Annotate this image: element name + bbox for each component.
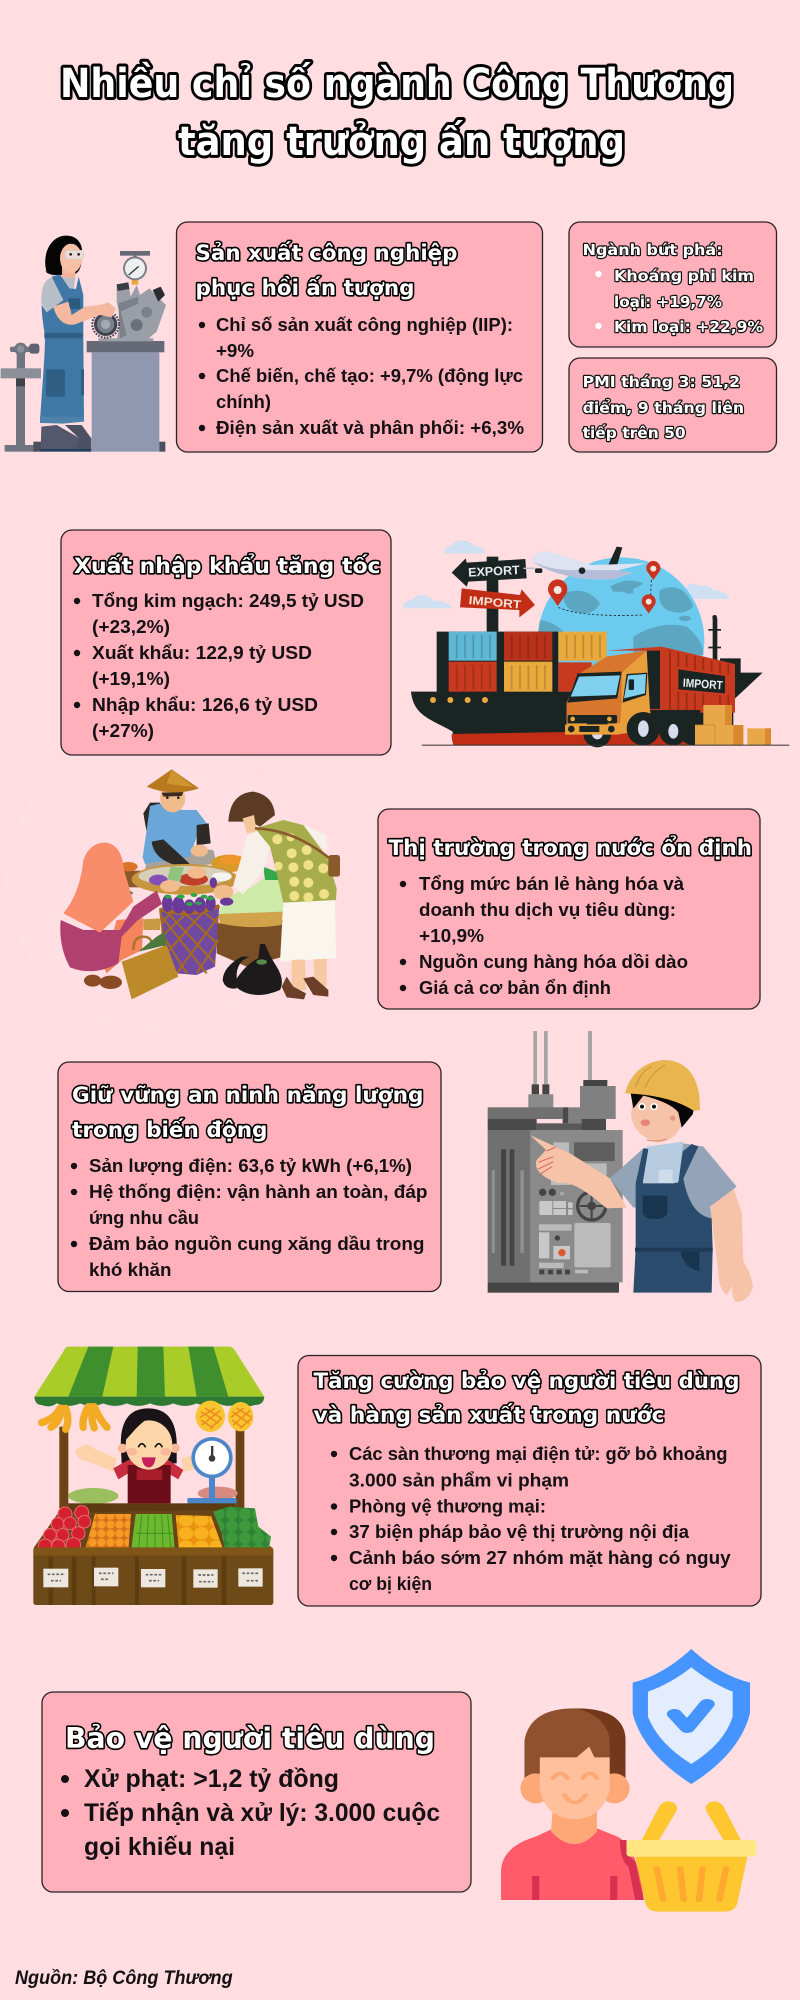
heading: Giữ vững an ninh năng lượng (72, 1083, 424, 1108)
icon: cargo ship, truck, plane and globe: IMPORT (682, 676, 724, 692)
bullet list (331, 1443, 731, 1594)
bullet list: +9% (216, 340, 254, 361)
panel background (176, 222, 542, 452)
bullet list: Phòng vệ thương mại: (349, 1496, 546, 1516)
PMI text: PMI tháng 3: 51,2 (583, 373, 740, 391)
panel: domestic market (378, 809, 760, 1009)
icon: cargo ship, truck, plane and globe: EXPORT (468, 563, 521, 580)
bullet list: Tổng kim ngạch: 249,5 tỷ USD (92, 590, 364, 611)
bullet list: Sản lượng điện: 63,6 tỷ kWh (+6,1%) (89, 1155, 412, 1176)
icon: engineer at electrical cabinet (488, 1031, 753, 1302)
title: Nhiều chỉ số ngành Công Thương (60, 61, 734, 107)
bullet list: Các sàn thương mại điện tử: gỡ bỏ khoảng (349, 1443, 728, 1464)
panel background (569, 222, 776, 347)
heading: trong biến động (72, 1118, 268, 1143)
icon: cargo ship, truck, plane and globe: IMPORT (468, 594, 522, 612)
icon: factory worker at engine (1, 236, 166, 452)
sector text: Ngành bứt phá: (583, 241, 723, 259)
bullet list (61, 1765, 440, 1861)
bullet list: Xuất khẩu: 122,9 tỷ USD (92, 642, 312, 663)
heading: Sản xuất công nghiệp (196, 241, 458, 266)
bullet list (400, 873, 688, 998)
bullet list: (+23,2%) (92, 616, 170, 637)
source: Nguồn: Bộ Công Thương (15, 1968, 233, 1989)
bullet list: Chế biến, chế tạo: +9,7% (động lực (216, 365, 523, 386)
icon: shopper, shield and basket (501, 1649, 756, 1912)
bullet list: +10,9% (419, 925, 484, 946)
heading: và hàng sản xuất trong nước (314, 1403, 664, 1428)
heading (314, 1369, 740, 1428)
bullet list: Chỉ số sản xuất công nghiệp (IIP): (216, 314, 513, 335)
title (60, 61, 734, 165)
sector text (583, 241, 763, 336)
panel: breakthrough sectors (569, 222, 776, 347)
panel background (569, 358, 776, 452)
bullet list: gọi khiếu nại (84, 1833, 235, 1861)
PMI text: tiếp trên 50 (583, 423, 686, 442)
bullet list (74, 590, 364, 741)
bullet list: 3.000 sản phẩm vi phạm (349, 1469, 569, 1490)
panel background (298, 1356, 761, 1606)
bullet list: (+19,1%) (92, 668, 170, 689)
heading: Thị trường trong nước ổn định (388, 835, 752, 861)
panel background (42, 1692, 471, 1892)
panel: consumer protection (42, 1692, 471, 1892)
bullet list: Tổng mức bán lẻ hàng hóa và (419, 873, 685, 894)
panel background (378, 809, 760, 1009)
bullet list (199, 314, 524, 438)
sector text: Kim loại: +22,9% (614, 318, 763, 336)
PMI text (583, 373, 744, 442)
panel: PMI (569, 358, 776, 452)
bullet list: Nguồn cung hàng hóa dồi dào (419, 951, 688, 972)
icon: fruit and vegetable stall (33, 1347, 273, 1605)
bullet list: (+27%) (92, 720, 154, 741)
bullet list (71, 1155, 428, 1280)
PMI text: điểm, 9 tháng liên (583, 398, 744, 417)
bullet list: chính) (216, 391, 271, 412)
bullet list: Điện sản xuất và phân phối: +6,3% (216, 417, 524, 438)
bullet list: Nhập khẩu: 126,6 tỷ USD (92, 694, 318, 715)
panel: import and export (61, 530, 391, 755)
bullet list: 37 biện pháp bảo vệ thị trường nội địa (349, 1521, 690, 1542)
sector text: Khoáng phi kim (614, 267, 754, 285)
heading: phục hồi ấn tượng (196, 276, 414, 301)
heading (72, 1083, 424, 1143)
panel: energy security (58, 1062, 441, 1292)
panel background (61, 530, 391, 755)
bullet list: cơ bị kiện (349, 1573, 432, 1594)
bullet list: khó khăn (89, 1259, 172, 1280)
title: tăng trưởng ấn tượng (178, 119, 625, 165)
heading: Xuất nhập khẩu tăng tốc (74, 553, 381, 579)
bullet list: Cảnh báo sớm 27 nhóm mặt hàng có nguy (349, 1547, 731, 1568)
bullet list: doanh thu dịch vụ tiêu dùng: (419, 899, 676, 920)
sector text: loại: +19,7% (614, 293, 722, 311)
bullet list: Đảm bảo nguồn cung xăng dầu trong (89, 1233, 424, 1254)
heading (196, 241, 458, 301)
bullet list: Giá cả cơ bản ổn định (419, 977, 611, 998)
panel background (58, 1062, 441, 1292)
heading: Tăng cường bảo vệ người tiêu dùng (314, 1369, 740, 1394)
heading: Bảo vệ người tiêu dùng (65, 1722, 435, 1755)
bullet list: Xử phạt: >1,2 tỷ đồng (84, 1765, 339, 1793)
icon: vegetable market scene (60, 769, 340, 999)
bullet list: ứng nhu cầu (89, 1207, 199, 1228)
bullet list: Tiếp nhận và xử lý: 3.000 cuộc (84, 1799, 440, 1827)
icon: cargo ship, truck, plane and globe (403, 540, 789, 747)
panel: industrial production (176, 222, 542, 452)
bullet list: Hệ thống điện: vận hành an toàn, đáp (89, 1181, 428, 1202)
panel: consumers and domestic goods (298, 1356, 761, 1606)
